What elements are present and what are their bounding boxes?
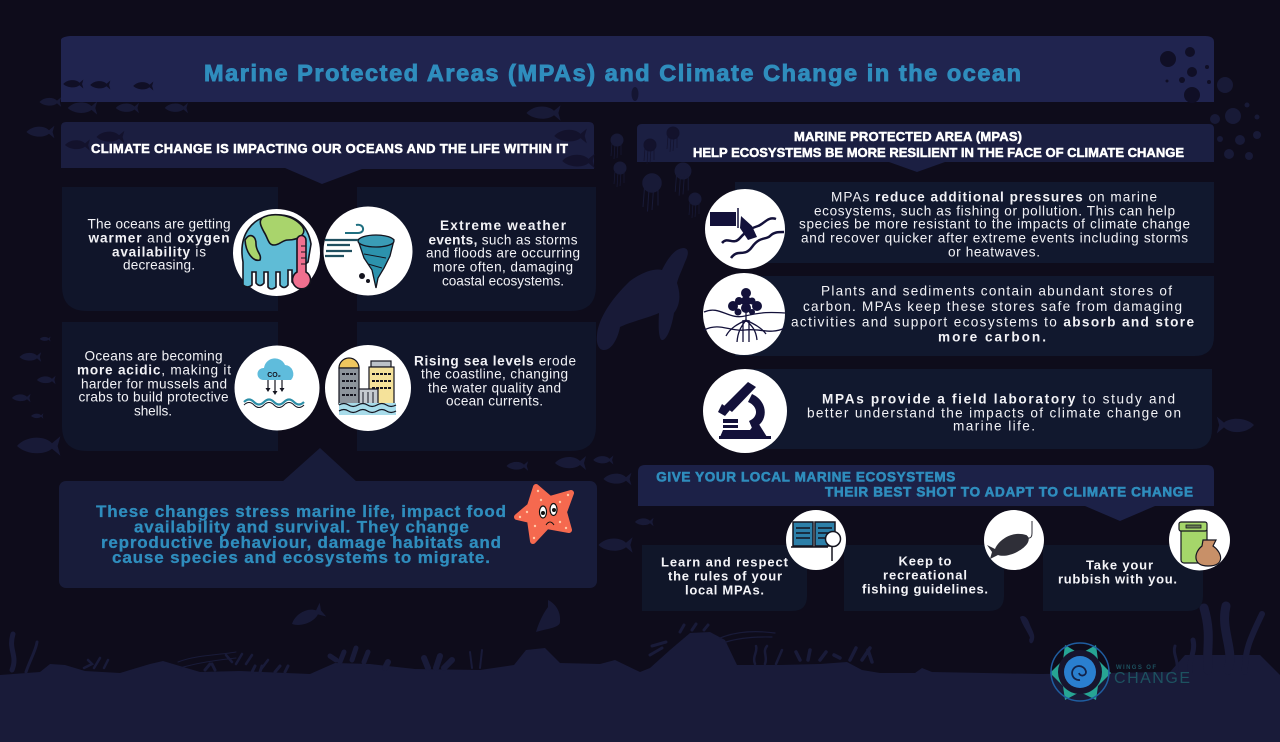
- icon: CO2 cloud over water: CO₂: [267, 372, 281, 379]
- card: fishing guidelines: [844, 545, 1004, 611]
- heading text: MARINE PROTECTED AREA (MPAS): [794, 129, 1022, 144]
- panel: warmer oceans: [62, 187, 278, 311]
- panel: title: [61, 36, 1214, 103]
- panel: consequences: [59, 481, 597, 588]
- icon: sad starfish: [517, 487, 571, 541]
- icon: bin and rubbish bag: [1169, 510, 1230, 570]
- heading text: [693, 129, 1184, 160]
- card: learn the rules: the rules of your: [668, 568, 782, 584]
- text: rising sea levels: Rising sea levels erode: [414, 354, 576, 368]
- text: carbon stores: carbon. MPAs keep these stores safe from damaging: [803, 299, 1182, 314]
- panel: acidic oceans: [62, 322, 278, 451]
- text: carbon stores: activities and support ecosystems to absorb and store: [791, 314, 1194, 330]
- icon: CO2 cloud over water: [234, 346, 320, 430]
- heading text: [656, 470, 1193, 500]
- heading text: GIVE YOUR LOCAL MARINE ECOSYSTEMS: [656, 470, 955, 484]
- text: field laboratory: marine life.: [953, 418, 1035, 434]
- text: consequences: availability and survival. They change: [134, 518, 469, 536]
- logo text: CHANGE: [1114, 670, 1190, 687]
- text: consequences: cause species and ecosystems to migrate.: [112, 548, 490, 567]
- icon: warming earth and thermometer: [233, 209, 320, 296]
- text: acidic oceans: shells.: [134, 404, 172, 418]
- text: carbon stores: [791, 284, 1194, 344]
- heading text: HELP ECOSYSTEMS BE MORE RESILIENT IN THE FACE OF CLIMATE CHANGE: [693, 145, 1184, 160]
- card: learn the rules: [642, 545, 807, 611]
- card: fishing guidelines: fishing guidelines.: [862, 582, 988, 596]
- text: field laboratory: better understand the impacts of climate change on: [807, 406, 1181, 420]
- panel: extreme weather: [357, 187, 596, 311]
- text: consequences: These changes stress marine life, impact food: [96, 502, 506, 521]
- text: reduce pressures: and recover quicker after extreme events including storms: [801, 230, 1188, 246]
- text: field laboratory: [807, 392, 1181, 434]
- card: fishing guidelines: recreational: [883, 568, 967, 582]
- text: field laboratory: MPAs provide a field laboratory to study and: [822, 392, 1175, 406]
- panel: field laboratory: [738, 369, 1212, 449]
- text: extreme weather: more often, damaging: [433, 260, 573, 274]
- text: extreme weather: and floods are occurring: [426, 246, 580, 260]
- text: carbon stores: Plants and sediments contain abundant stores of: [821, 284, 1172, 298]
- text: acidic oceans: harder for mussels and: [81, 376, 227, 392]
- icon: mangrove: [703, 273, 785, 355]
- logo text: WINGS OF: [1116, 665, 1156, 671]
- background silhouettes: marine life: [12, 77, 1261, 632]
- icon: flooded buildings: [325, 345, 411, 431]
- text: acidic oceans: Oceans are becoming: [84, 348, 222, 364]
- card: learn the rules: local MPAs.: [685, 582, 764, 598]
- card: fishing guidelines: Keep to: [898, 554, 952, 568]
- text: rising sea levels: the coastline, changing: [421, 366, 568, 382]
- heading text: CLIMATE CHANGE IS IMPACTING OUR OCEANS AND THE LIFE WITHIN IT: [91, 141, 568, 156]
- card: take rubbish: [1043, 545, 1203, 611]
- heading text: THEIR BEST SHOT TO ADAPT TO CLIMATE CHANGE: [825, 484, 1193, 500]
- panel: give ecosystems their best shot heading: [638, 465, 1214, 521]
- text: acidic oceans: more acidic, making it: [77, 362, 231, 378]
- text: consequences: [96, 502, 506, 567]
- text: extreme weather: coastal ecosystems.: [442, 274, 564, 288]
- panel: carbon stores: [735, 276, 1214, 356]
- text: reduce pressures: ecosystems, such as fishing or pollution. This can help: [814, 204, 1175, 218]
- panel: climate change impacts heading: [61, 122, 595, 184]
- text: acidic oceans: [77, 348, 231, 418]
- card: take rubbish: rubbish with you.: [1058, 572, 1177, 586]
- icon: microscope: [703, 369, 787, 453]
- text: warmer oceans: [88, 216, 230, 272]
- panel: rising sea levels: [357, 322, 596, 451]
- text: rising sea levels: ocean currents.: [446, 394, 543, 408]
- heading: main title: Marine Protected Areas (MPAs) and Climate Change in the ocean: [204, 60, 1021, 86]
- text: consequences: reproductive behaviour, damage habitats and: [101, 533, 501, 552]
- logo: Wings of Change: [1050, 643, 1190, 701]
- panel: reduce pressures: [735, 182, 1214, 263]
- icon: book and magnifier: [786, 510, 846, 570]
- text: rising sea levels: the water quality and: [428, 380, 561, 396]
- text: extreme weather: Extreme weather: [440, 218, 567, 233]
- text: reduce pressures: species be more resistant to the impacts of climate change: [799, 216, 1190, 232]
- arrow: up to consequences: [282, 448, 357, 482]
- seahorse silhouette: [1020, 616, 1034, 643]
- text: warmer oceans: warmer and oxygen: [88, 230, 230, 246]
- panel: MPAs help ecosystems heading: [637, 124, 1214, 172]
- text: warmer oceans: decreasing.: [123, 258, 195, 272]
- text: acidic oceans: crabs to build protective: [78, 390, 228, 404]
- text: warmer oceans: availability is: [112, 244, 206, 260]
- text: reduce pressures: MPAs reduce additional pressures on marine: [831, 190, 1157, 204]
- text: carbon stores: more carbon.: [938, 330, 1046, 344]
- icon: pollution outfall: [705, 189, 785, 269]
- icon: fish on a hook: [984, 510, 1044, 570]
- card: learn the rules: Learn and respect: [661, 554, 789, 570]
- text: rising sea levels: [414, 354, 576, 408]
- seabed with kelp and corals: [0, 606, 1280, 742]
- icon: tornado and wind: [324, 206, 412, 296]
- text: extreme weather: events, such as storms: [428, 232, 578, 248]
- text: reduce pressures: [799, 190, 1190, 260]
- card: take rubbish: Take your: [1086, 558, 1153, 572]
- text: reduce pressures: or heatwaves.: [948, 244, 1040, 260]
- text: warmer oceans: The oceans are getting: [88, 216, 230, 232]
- text: extreme weather: [426, 218, 580, 288]
